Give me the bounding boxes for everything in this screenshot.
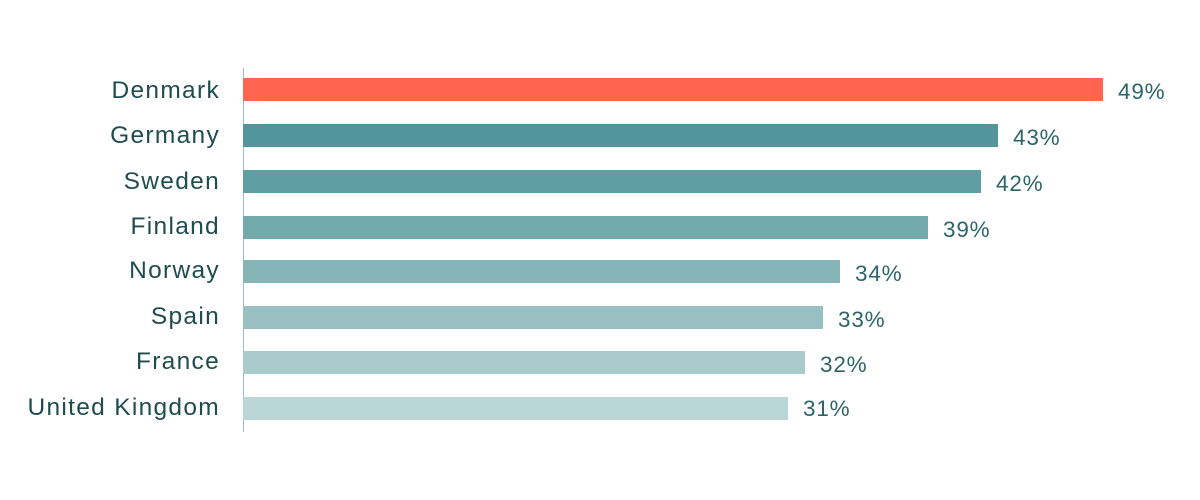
row: Sweden [124,168,1043,196]
row: France [136,348,867,377]
row: Sweden: Sweden [124,168,220,195]
row: Denmark: Denmark [112,77,220,104]
row: France: France [136,348,220,375]
row: Sweden: 42% [996,171,1043,196]
row: Denmark [112,77,1165,104]
row: United Kingdom [27,394,850,421]
row: Finland: Finland [131,213,220,240]
row: Finland [131,213,990,242]
row: Germany: Germany [110,122,220,149]
chart: bar chart by country [27,68,1165,432]
row: Norway [129,257,902,286]
row: Spain: 33% [838,307,885,332]
row: United Kingdom: 31% [803,396,850,421]
row: Norway: Norway [129,257,220,284]
row: Germany: 43% [1013,125,1060,150]
row: France: 32% [820,352,867,377]
row: Spain [151,303,885,332]
axis line [243,68,244,432]
row: Norway: 34% [855,261,902,286]
row: Finland: 39% [943,217,990,242]
row: Germany [110,122,1060,150]
row: Spain: Spain [151,303,220,330]
row: Denmark: 49% [1118,79,1165,104]
row: United Kingdom: United Kingdom [27,394,220,421]
